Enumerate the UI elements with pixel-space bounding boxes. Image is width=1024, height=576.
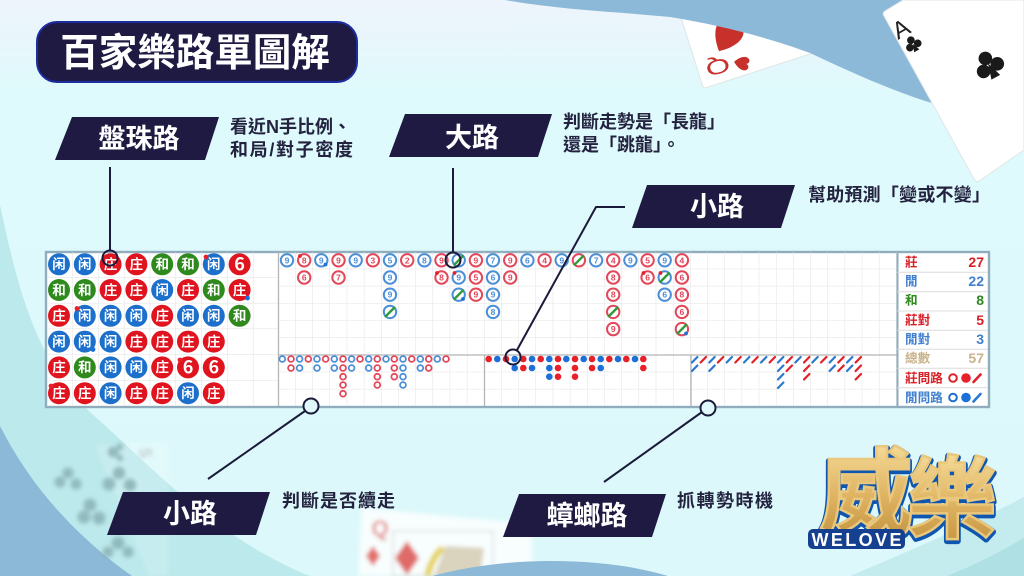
title: 百家樂路單圖解 xyxy=(60,32,330,75)
label: 蟑螂路: 蟑螂路 xyxy=(546,501,628,531)
chart: bead road: 庄 xyxy=(155,356,169,376)
stats table: 22 xyxy=(968,273,984,289)
stats table: 57 xyxy=(968,350,984,366)
chart: bead road: 闲 xyxy=(207,253,221,273)
text: lower 小路 description: 判斷是否續走 xyxy=(282,491,395,511)
label: lower 小路 xyxy=(107,492,270,535)
playing card: queen of hearts: Q xyxy=(703,52,733,81)
top blue wave xyxy=(505,0,1000,104)
playing card: queen of hearts xyxy=(678,0,835,88)
chart: big road: 9 xyxy=(285,255,290,265)
chart: big road: 9 xyxy=(353,255,358,265)
label: 大路 xyxy=(389,114,552,157)
chart: big road xyxy=(281,254,688,335)
chart: big road: 9 xyxy=(508,255,513,265)
stats table: 閒對 xyxy=(905,332,931,346)
chart: bead road: 庄 xyxy=(207,330,221,350)
chart: bead road: 和 xyxy=(207,279,221,299)
chart: bead road: 闲 xyxy=(181,305,195,325)
stats table: 閒 xyxy=(905,274,918,288)
stats table: 8 xyxy=(976,292,984,308)
faded playing card: clubs: 5 xyxy=(135,448,155,458)
chart: bead road: 闲 xyxy=(78,330,92,350)
text: 盤珠路 description: 和局/對子密度 xyxy=(230,139,353,160)
chart: small road xyxy=(485,356,647,380)
chart: bead road: 庄 xyxy=(181,330,195,350)
chart: bead road: 闲 xyxy=(52,253,66,273)
label: lower 小路: 小路 xyxy=(163,499,217,529)
chart: big road: 6 xyxy=(645,272,650,282)
chart: big road: 5 xyxy=(388,255,393,265)
connector: 大路 xyxy=(446,168,460,268)
stats table: 3 xyxy=(976,331,984,347)
chart: bead road: 和 xyxy=(155,253,169,273)
chart: big road: 6 xyxy=(680,307,685,317)
text: 大路 description: 判斷走勢是「長龍」 xyxy=(563,111,725,132)
stats table: 莊問路 xyxy=(905,370,943,386)
chart: bead road: 庄 xyxy=(207,382,221,402)
logo: 威樂 WELOVE: 樂 xyxy=(907,453,997,553)
stats table: 5 xyxy=(976,312,984,328)
playing card: ace of clubs: A xyxy=(888,14,915,45)
chart: big road: 8 xyxy=(680,290,685,300)
chart: bead road: 闲 xyxy=(104,305,117,325)
chart: bead road: 庄 xyxy=(130,253,143,273)
faded playing card: clubs xyxy=(54,443,168,576)
chart: big road: 9 xyxy=(491,290,496,300)
chart: big road: 3 xyxy=(371,255,376,265)
chart: bead road: 庄 xyxy=(181,279,195,299)
chart: bead road: 闲 xyxy=(52,330,66,350)
chart: big road: 4 xyxy=(542,255,547,265)
chart: bead road: 闲 xyxy=(104,356,117,376)
label: upper 小路: 小路 xyxy=(690,192,744,222)
chart: bead road: 闲 xyxy=(130,356,143,376)
logo: 威樂 WELOVE: 樂 xyxy=(907,451,997,551)
logo: 威樂 WELOVE: 威 xyxy=(819,443,913,548)
connector: 盤珠路 xyxy=(102,167,118,266)
text: upper 小路 description: 幫助預測「變或不變」 xyxy=(808,184,990,205)
chart: bead road: 庄 xyxy=(130,279,143,299)
chart: bead road: 庄 xyxy=(52,382,66,402)
faded playing card: queen of diamonds xyxy=(358,508,532,576)
roadmap panel xyxy=(46,250,989,407)
playing card: ace of clubs xyxy=(883,0,1024,182)
chart: bead road: 庄 xyxy=(233,279,246,299)
chart: bead road: 庄 xyxy=(130,382,143,402)
chart: bead road: 庄 xyxy=(155,330,169,350)
stats table: 總數 xyxy=(905,350,931,366)
text: 大路 description: 還是「跳龍」。 xyxy=(563,134,680,155)
chart: bead road xyxy=(48,250,251,404)
chart: big road: 9 xyxy=(456,272,461,282)
chart: big road: 6 xyxy=(302,272,307,282)
chart: big road: 9 xyxy=(662,255,667,265)
chart: big eye road xyxy=(279,356,449,397)
chart: big road: 8 xyxy=(302,255,307,265)
logo: 威樂 WELOVE: 威 xyxy=(819,441,913,546)
chart: big road: 2 xyxy=(405,255,410,265)
chart: big road: 6 xyxy=(662,290,667,300)
chart: bead road: 6 xyxy=(208,354,219,380)
chart: bead road: 庄 xyxy=(52,305,66,325)
chart: cockroach road xyxy=(692,357,861,388)
chart: bead road: 6 xyxy=(183,354,193,380)
connector: lower 小路 xyxy=(208,398,318,479)
label: 盤珠路 xyxy=(55,117,219,160)
bottom blue wave xyxy=(432,561,668,576)
label: 大路: 大路 xyxy=(445,123,499,153)
chart: big road: 9 xyxy=(474,255,479,265)
text: 盤珠路 description: 看近N手比例、 xyxy=(230,117,351,137)
chart: big road: 9 xyxy=(319,255,324,265)
chart: big road: 9 xyxy=(388,290,393,300)
chart: big road: 9 xyxy=(508,272,513,282)
text: 大路 description xyxy=(563,111,725,155)
stats table: 莊對 xyxy=(905,312,931,328)
chart: big road: 8 xyxy=(439,272,444,282)
chart: big road: 6 xyxy=(525,255,530,265)
logo: 威樂 WELOVE xyxy=(808,441,997,553)
chart: bead road: 闲 xyxy=(78,305,92,325)
chart: big road: 5 xyxy=(474,272,479,282)
chart: big road: 8 xyxy=(611,272,616,282)
chart: bead road: 闲 xyxy=(104,382,117,402)
chart: big road: 9 xyxy=(439,255,444,265)
connector: upper 小路 xyxy=(506,207,625,364)
chart: bead road: 6 xyxy=(234,250,245,276)
text: 盤珠路 description xyxy=(230,117,353,160)
chart: bead road: 闲 xyxy=(155,279,169,299)
chart: bead road: 闲 xyxy=(104,330,117,350)
chart: bead road: 庄 xyxy=(104,253,117,273)
label: 盤珠路: 盤珠路 xyxy=(98,124,180,154)
stats table: 27 xyxy=(968,254,984,270)
title xyxy=(37,22,357,82)
chart: big road: 8 xyxy=(422,255,427,265)
chart: big road: 4 xyxy=(680,255,685,265)
chart: bead road: 和 xyxy=(78,356,92,376)
chart: bead road: 庄 xyxy=(52,356,66,376)
chart: bead road: 庄 xyxy=(155,382,169,402)
chart: bead road: 庄 xyxy=(155,305,169,325)
chart: bead road: 庄 xyxy=(78,382,92,402)
chart: big road: 5 xyxy=(645,255,650,265)
chart: bead road: 闲 xyxy=(78,253,92,273)
chart: bead road: 闲 xyxy=(207,305,221,325)
chart: big road: 8 xyxy=(491,307,496,317)
chart: big road: 7 xyxy=(336,272,341,282)
logo: 威樂 WELOVE: WELOVE xyxy=(812,530,902,550)
chart: big road: 9 xyxy=(559,255,564,265)
chart: bead road: 和 xyxy=(78,279,92,299)
chart: bead road: 庄 xyxy=(104,279,117,299)
connector: 蟑螂路 xyxy=(604,400,716,482)
chart: big road: 9 xyxy=(628,255,633,265)
chart: big road: 6 xyxy=(491,272,496,282)
chart: big road: 9 xyxy=(388,272,393,282)
chart: big road: 9 xyxy=(474,290,479,300)
chart: bead road: 庄 xyxy=(130,330,143,350)
stats table xyxy=(905,254,984,405)
faded playing card: queen of diamonds: Q xyxy=(371,516,389,541)
label: upper 小路 xyxy=(632,185,795,228)
stats table: 閒問路 xyxy=(905,390,943,405)
text: 蟑螂路 description: 抓轉勢時機 xyxy=(677,491,773,511)
chart: bead road: 和 xyxy=(233,305,246,325)
chart: big road: 9 xyxy=(611,324,616,334)
chart: bead road: 和 xyxy=(181,253,195,273)
stats table: 莊 xyxy=(905,254,918,270)
chart: big road: 8 xyxy=(611,290,616,300)
stats table: 和 xyxy=(905,294,918,308)
chart: big road: 7 xyxy=(594,255,599,265)
chart: big road: 9 xyxy=(336,255,341,265)
label: 蟑螂路 xyxy=(503,494,666,537)
chart: big road: 4 xyxy=(611,255,616,265)
chart: big road: 7 xyxy=(491,255,496,265)
chart: bead road: 闲 xyxy=(130,305,143,325)
chart: big road: 6 xyxy=(680,272,685,282)
chart: bead road: 闲 xyxy=(181,382,195,402)
chart: bead road: 和 xyxy=(52,279,66,299)
